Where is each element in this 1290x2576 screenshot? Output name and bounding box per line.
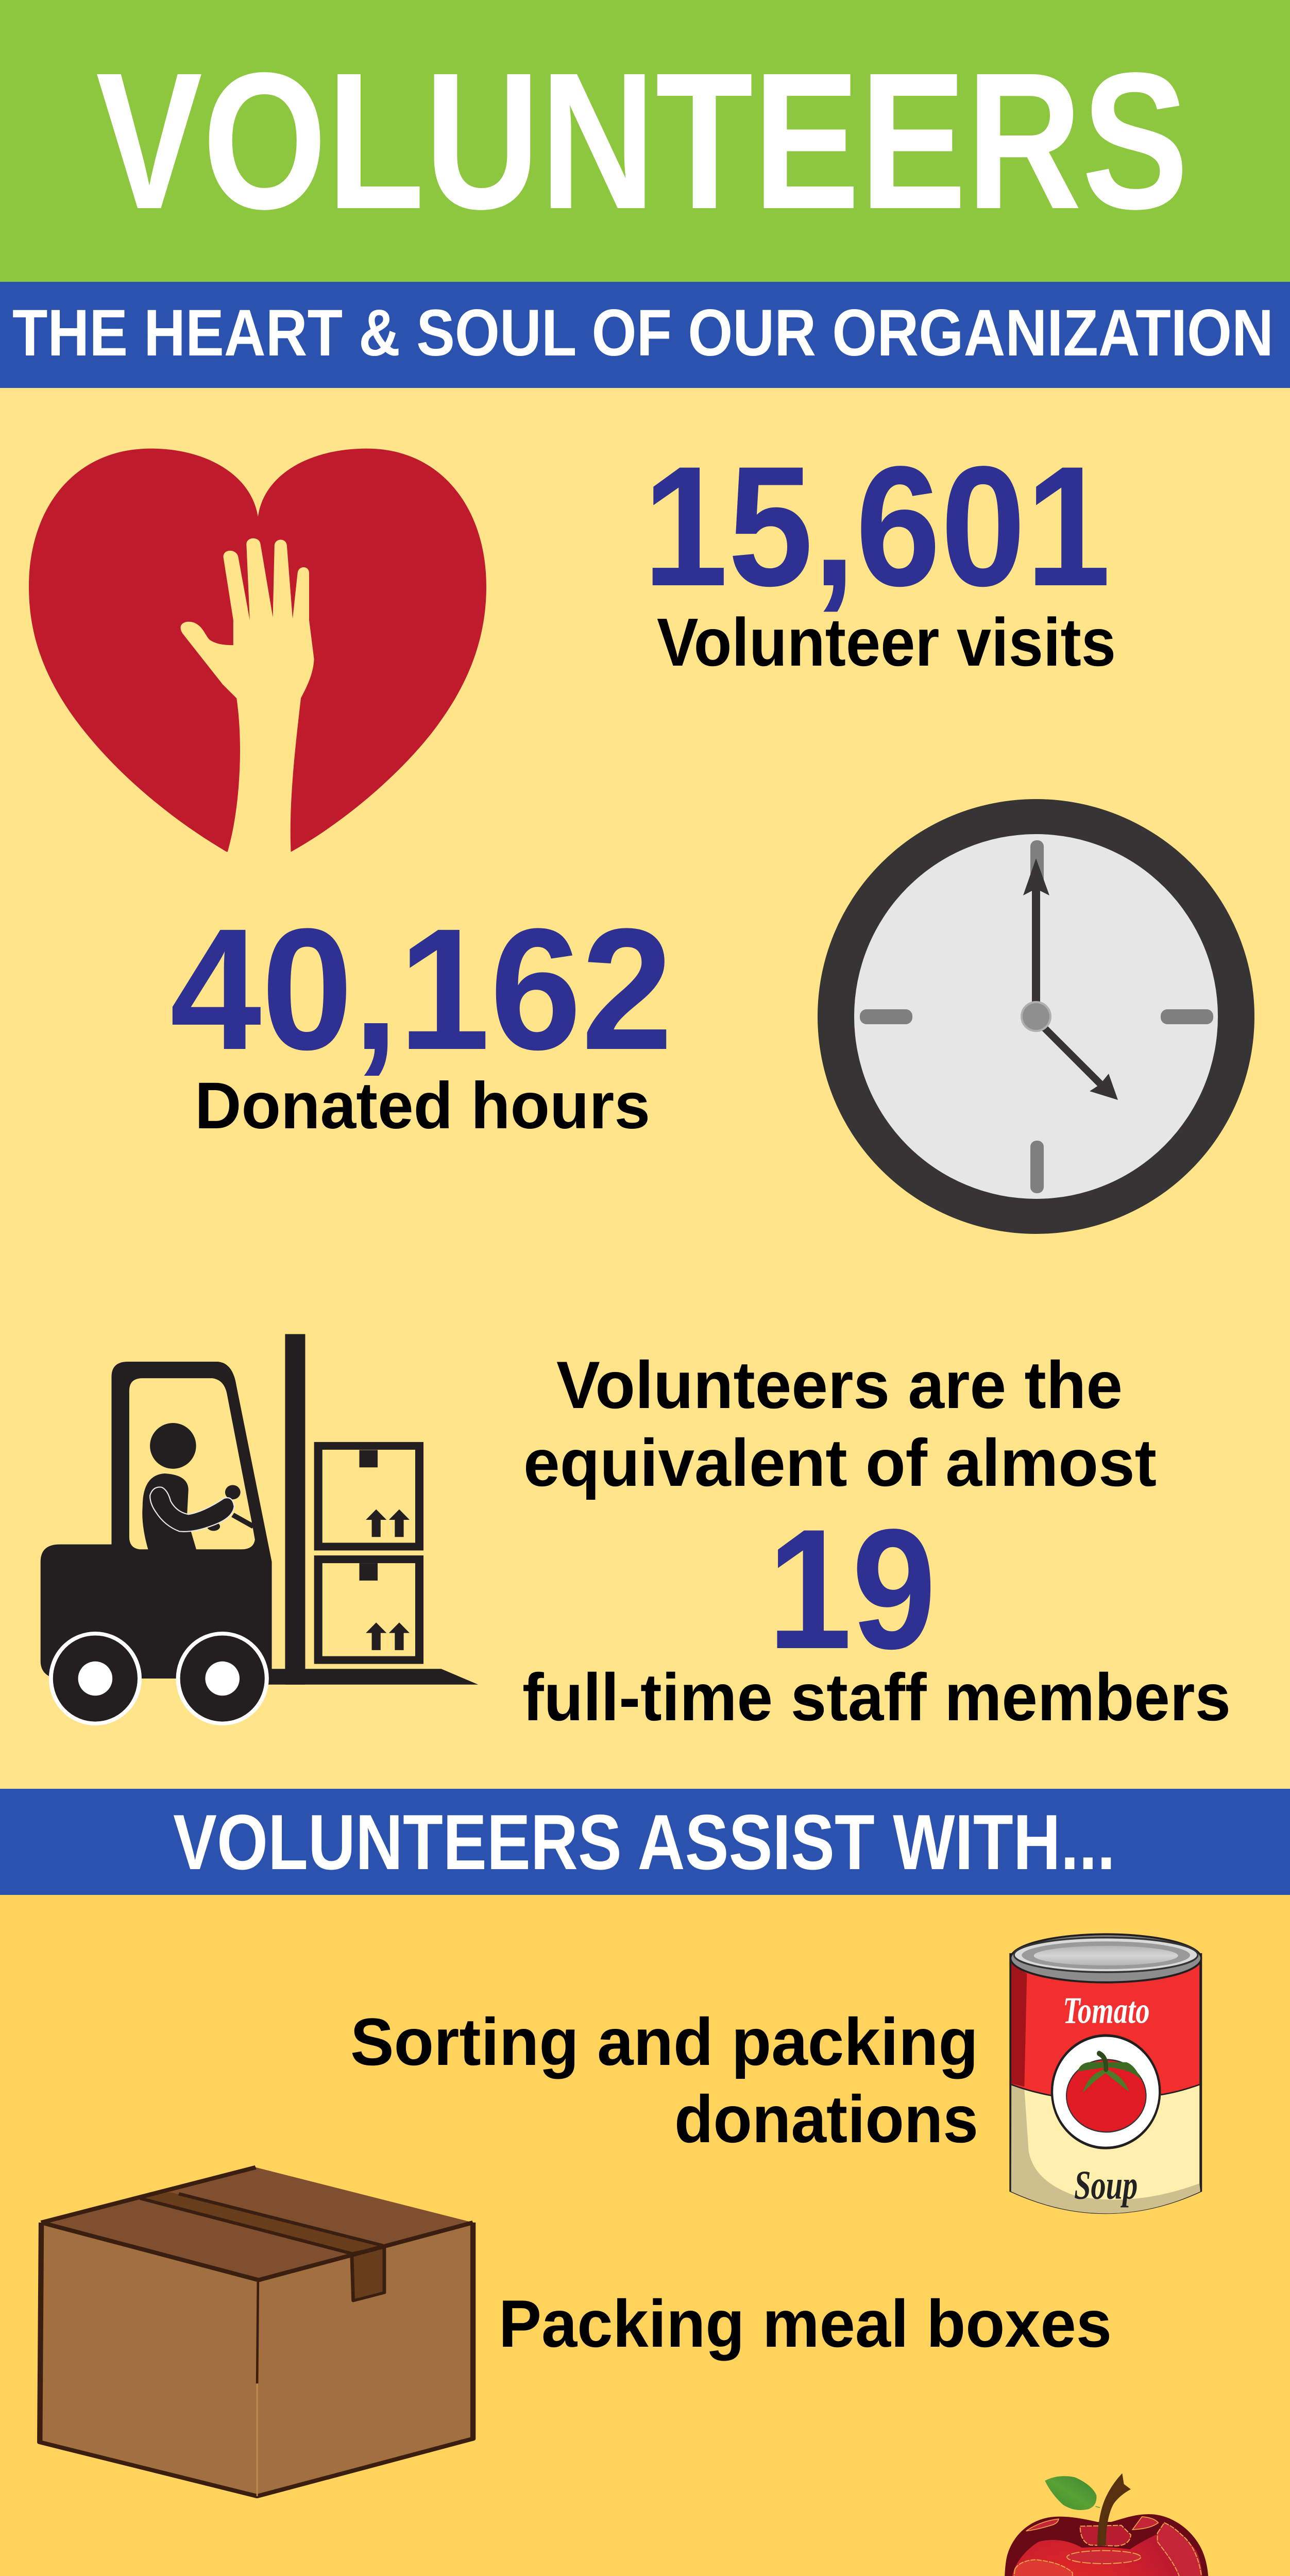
line: equivalent of almost: equivalent of almost [523,1425,1157,1500]
panel: volunteer tasks [0,1895,1290,2576]
task: sorting and packing donations [350,2004,978,2157]
icon: tomato soup can: Soup [1074,2162,1138,2208]
icon: apple [1005,2473,1209,2576]
number: 40,162: 40,162 [170,893,673,1086]
task: sorting and packing donations: donations [674,2081,978,2157]
stat: donated hours [170,893,673,1143]
icon: tomato soup can [1009,1934,1202,2214]
task: packing meal boxes: Packing meal boxes [499,2286,1112,2361]
panel: statistics [0,388,1290,1789]
line: full-time staff members: full-time staff members [522,1659,1231,1735]
panel: assist band [0,1789,1290,1895]
text block: staff equivalent [522,1347,1231,1735]
number: 19: 19 [768,1494,936,1685]
stat: volunteer visits [643,431,1116,680]
line: volunteers are the: Volunteers are the [556,1347,1123,1422]
icon: forklift with boxes [41,1334,478,1723]
label: donated hours: Donated hours [195,1069,650,1143]
icon: heart with raised hand [29,449,486,855]
heading: volunteers assist with: VOLUNTEERS ASSIST WITH... [173,1799,1115,1886]
panel: subtitle band [0,282,1290,388]
label: volunteer visits: Volunteer visits [657,604,1116,680]
icon: tomato soup can: Tomato [1063,1990,1150,2031]
icon: clock [818,799,1254,1234]
panel: header [0,0,1290,282]
task: sorting and packing donations: Sorting and packing [350,2004,978,2079]
number: 15,601: 15,601 [643,431,1111,622]
icon: cardboard box [40,2167,473,2496]
